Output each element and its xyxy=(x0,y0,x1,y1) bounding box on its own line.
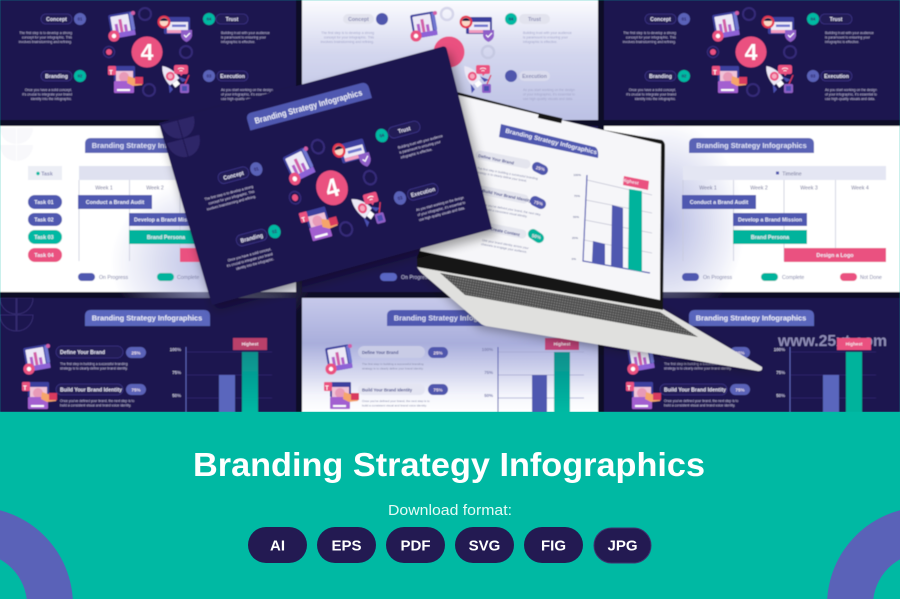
tilted slide cycle diagram: involves brainstorming and refining. xyxy=(206,194,257,212)
slide: dark bar chart, bottom right: strategy is to clearly define your brand identity. xyxy=(664,366,732,370)
slide: dark cycle, top right: it's crucial to integrate your brand xyxy=(626,92,676,96)
main heading: Branding Strategy Infographics xyxy=(193,446,705,483)
tag: highest, bottom right xyxy=(837,338,871,350)
subheading: Download format: xyxy=(388,502,512,519)
slide: light gantt chart, middle right: Complete xyxy=(782,275,804,281)
slide: dark cycle, top left: use high-quality visuals and data. xyxy=(221,97,271,101)
tilted slide cycle diagram: Building trust with your audience xyxy=(397,134,443,150)
tilted slide cycle diagram: 03 xyxy=(397,195,403,201)
slide: light gantt chart, middle right: Not Done xyxy=(860,275,882,281)
tilted slide cycle diagram: use high-quality visuals and data. xyxy=(418,206,466,222)
slide: dark cycle, top right: concept for your infographic. This xyxy=(626,36,676,40)
slide: dark bar chart, bottom left: 75% xyxy=(131,388,141,392)
slide: dark cycle, top right: 03 xyxy=(811,74,816,78)
slide: dark cycle, top left: it's crucial to integrate your brand xyxy=(22,92,72,96)
tilted slide cycle diagram: T xyxy=(301,216,307,224)
slide: dark cycle, top right: Concept xyxy=(650,17,671,23)
laptop screen xyxy=(417,92,665,303)
slide: dark cycle, top left: 4 xyxy=(141,39,154,65)
slide: dark bar chart, bottom left: 50% xyxy=(172,393,181,398)
slide: light gantt chart, middle left: Task 03 xyxy=(34,235,54,241)
slide: dark cycle, top right: 02 xyxy=(682,74,687,78)
slide: dark cycle, top right: Trust xyxy=(830,17,843,23)
slide: dark cycle, top right: identity into the infographic. xyxy=(635,97,676,101)
teal footer panel xyxy=(0,412,900,599)
slide: dark cycle, top left: identity into the infographic. xyxy=(31,97,72,101)
slide: light cycle, top centre: As you start working on the design xyxy=(523,88,575,92)
slide: dark, middle centre: On Progress xyxy=(401,275,431,281)
screen bar chart: 75% xyxy=(574,194,580,198)
slide: light gantt chart, middle left: Week 1 xyxy=(95,186,113,192)
slide: dark cycle, top left: As you start working on the design xyxy=(221,88,273,92)
format pill PDF xyxy=(386,527,445,563)
tilted slide cycle diagram: 02 xyxy=(272,228,278,235)
slide: dark bar chart, bottom left: Once you've defined your brand, the next step is to xyxy=(60,399,134,403)
slide: dark bar chart, bottom right: build a consistent visual and brand voice identity. xyxy=(664,404,735,408)
slide: light gantt chart, middle left: Week 2 xyxy=(146,186,164,192)
slide: dark cycle, top left: 01 xyxy=(78,16,83,22)
slide: light bar chart, bottom centre: 50% xyxy=(484,393,493,398)
slide: dark bar chart, bottom left: Highest xyxy=(242,342,259,346)
slide: dark cycle, top right: use high-quality visuals and data. xyxy=(825,97,875,101)
slide: dark cycle, top left: T xyxy=(109,70,113,76)
slide: light bar chart, bottom centre: Define Your Brand xyxy=(362,350,399,355)
screen bar chart: 50% xyxy=(573,215,579,219)
screen list rows xyxy=(476,153,545,254)
screen bar chart xyxy=(572,173,652,273)
format pill FIG: FIG xyxy=(541,538,566,554)
slide: dark cycle, top right: 01 xyxy=(682,16,687,22)
screen list rows: Once you've defined your brand, the next step xyxy=(480,202,541,217)
slide: dark bar chart, bottom right: Once you've defined your brand, the next step is to xyxy=(664,399,738,403)
slide: light cycle, top centre: 04 xyxy=(509,16,514,22)
screen list rows: 50% xyxy=(531,233,541,240)
slide: dark bar chart, bottom right: T xyxy=(627,386,631,392)
slide: light cycle, top centre: Execution xyxy=(522,74,547,80)
format pill EPS xyxy=(317,527,376,563)
slide: dark bar chart, bottom right: 25% xyxy=(735,350,745,356)
format pill EPS: EPS xyxy=(331,538,362,554)
slide: dark cycle, top right xyxy=(604,0,900,120)
slide: dark bar chart, bottom left xyxy=(0,298,296,412)
slide: dark bar chart, bottom right xyxy=(604,298,900,412)
slide: light cycle, top centre: infographic is effective. xyxy=(523,40,557,44)
slide: light gantt chart, middle right: Week 1 xyxy=(699,186,717,192)
slide: dark bar chart, bottom left: Branding Strategy Infographics xyxy=(92,314,202,322)
slide: light bar chart, bottom centre: The first step in building a successful branding xyxy=(362,362,424,366)
slide collage xyxy=(0,0,900,412)
slide: light cycle, top centre: Concept xyxy=(348,17,369,23)
slide: light gantt chart, middle left: Brand Persona xyxy=(147,235,186,241)
tilted slide cycle diagram: 01 xyxy=(253,166,260,172)
format pill AI xyxy=(248,527,307,563)
slide: light gantt chart, middle left: On Progress xyxy=(99,275,129,281)
slide: light gantt chart, middle left: Task 01 xyxy=(34,200,54,206)
collage backdrop xyxy=(0,0,900,412)
format pill FIG xyxy=(524,527,583,563)
slide: light bar chart, bottom centre: 75% xyxy=(433,388,443,392)
format pill AI: AI xyxy=(270,538,285,554)
slide: light cycle, top centre: involves brainstorming and refining. xyxy=(321,40,374,44)
screen list rows: 25% xyxy=(535,165,545,172)
slide: dark cycle, top left: involves brainstorming and refining. xyxy=(19,40,72,44)
slide: light gantt chart, middle right: Design a Logo xyxy=(816,253,854,259)
slide: light bar chart, bottom centre: Once you've defined your brand, the next step is to xyxy=(362,399,430,403)
slide: dark bar chart, bottom left: Define Your Brand xyxy=(60,350,105,356)
slide: dark cycle, top left: Trust xyxy=(226,17,239,23)
laptop xyxy=(417,92,762,371)
screen list rows: 75% xyxy=(533,200,543,207)
slide: light bar chart, bottom centre: Build Your Brand Identity xyxy=(362,388,413,392)
slide: dark, middle centre xyxy=(302,126,598,292)
slide: light gantt chart, middle right: Week 4 xyxy=(851,186,869,192)
slide: dark bar chart, bottom left: build a consistent visual and brand voice identity. xyxy=(60,404,131,408)
slide: dark cycle, top left: Once you have a solid concept, xyxy=(25,88,72,92)
slide: light bar chart, bottom centre: Branding Strategy Infographics xyxy=(394,314,504,322)
watermark: www.25xt.com xyxy=(777,333,887,350)
format pill PDF: PDF xyxy=(400,538,430,554)
format pill JPG: JPG xyxy=(607,538,638,554)
tilted slide cycle diagram: infographic is effective. xyxy=(400,147,433,160)
tilted slide cycle diagram: concept for your infographic. This xyxy=(208,189,255,206)
slide: light gantt chart, middle left: Develop a Brand Mission xyxy=(134,218,198,224)
hinge xyxy=(417,257,663,310)
slide: dark bar chart, bottom left: Build Your Brand Identity xyxy=(60,388,122,394)
corner arc left xyxy=(0,507,73,599)
tilted slide cycle diagram: 4 xyxy=(322,173,343,204)
slide: dark cycle, top left: 03 xyxy=(207,74,212,78)
screen list rows: strategy is to clearly define your brand. xyxy=(476,170,527,183)
screen list rows: channels to engage your audience. xyxy=(481,242,528,254)
slide: light bar chart, bottom centre: build a consistent visual and brand voice identity. xyxy=(362,404,427,408)
tilted slide cycle diagram: Branding xyxy=(240,233,264,245)
slide: light gantt chart, middle right: On Progress xyxy=(703,275,733,281)
slide: dark cycle, top left: Concept xyxy=(46,17,67,23)
screen bar chart: 100% xyxy=(573,173,581,177)
screen list rows: Define Your Brand xyxy=(478,153,515,166)
slide: dark bar chart, bottom right: Branding Strategy Infographics xyxy=(696,314,806,322)
tilted slide cycle diagram: Execution xyxy=(410,187,437,199)
slide: dark cycle, top left: 02 xyxy=(78,74,83,78)
tilted slide cycle diagram: is paramount to ensuring your xyxy=(399,140,442,155)
tilted slide cycle diagram: identity into the infographic. xyxy=(236,257,275,271)
slide: light cycle, top centre: Building trust with your audience xyxy=(523,31,572,35)
tilted slide cycle diagram: it's crucial to integrate your brand xyxy=(226,252,273,268)
screen list rows: Use your brand identity across your xyxy=(482,238,529,250)
tilted slide cycle diagram: 04 xyxy=(379,132,385,139)
slide: dark bar chart, bottom right: 100% xyxy=(774,347,785,352)
slide: light gantt chart, middle left: Task xyxy=(41,172,53,178)
slide: light gantt chart, middle left xyxy=(0,126,320,347)
slide: dark bar chart, bottom right: Build Your Brand Identity xyxy=(664,388,726,394)
screen bar chart: 0% xyxy=(572,257,576,261)
slide: dark cycle, top right: Branding xyxy=(649,74,672,80)
slide: dark bar chart, bottom left: 100% xyxy=(170,347,181,352)
slide: light bar chart, bottom centre: strategy is to clearly define your brand identity. xyxy=(362,366,424,370)
screen list rows: Build Your Brand Identity xyxy=(482,188,532,204)
slide: light gantt chart, middle left: Branding Strategy Infographics xyxy=(92,141,202,150)
slide: dark cycle, top right: infographic is effective. xyxy=(825,40,859,44)
screen list rows: Create Content xyxy=(490,226,521,237)
slide: dark cycle, top right: 4 xyxy=(745,39,758,65)
slide: dark cycle, top left: is paramount to ensuring your xyxy=(221,36,267,40)
slide: light gantt chart, middle left: Task 02 xyxy=(34,218,54,224)
screen bar chart: 25% xyxy=(572,236,578,240)
slide: light bar chart, bottom centre xyxy=(302,298,598,412)
laptop shadow xyxy=(417,268,762,374)
slide: dark bar chart, bottom right: The first step in building a successful branding xyxy=(664,362,732,366)
slide: light bar chart, bottom centre: T xyxy=(325,386,329,392)
slide: dark bar chart, bottom right: Define Your Brand xyxy=(664,350,709,356)
slide: light cycle, top centre: use high-quality visuals and data. xyxy=(523,97,573,101)
slide: light gantt chart, middle left: Complete xyxy=(177,275,199,281)
slide: dark cycle, top right: Execution xyxy=(824,74,849,80)
slide: dark cycle, top right: is paramount to ensuring your xyxy=(825,36,871,40)
slide: light bar chart, bottom centre: 25% xyxy=(433,350,443,356)
slide: light gantt chart, middle right: Conduct a Brand Audit xyxy=(690,200,748,206)
tilted slide cycle diagram: The first step is to develop a strong xyxy=(204,185,254,202)
slide: light gantt chart, middle right: Brand Persona xyxy=(751,235,790,241)
slide: dark cycle, top right: of your infographic, it's essential to xyxy=(825,92,877,96)
slide: dark cycle, top left: Branding xyxy=(45,74,68,80)
tilted slide decoration xyxy=(162,116,204,161)
slide: dark cycle, top right: involves brainstorming and refining. xyxy=(623,40,676,44)
laptop base xyxy=(417,258,762,371)
slide: light cycle, top centre: Trust xyxy=(528,17,541,23)
tilted slide title xyxy=(246,82,372,130)
slide: light cycle, top centre xyxy=(302,0,598,120)
slide: dark bar chart, bottom left: 75% xyxy=(172,370,181,375)
screen list rows: The first step in building a successful branding xyxy=(477,166,538,181)
slide: dark bar chart, bottom right: 50% xyxy=(776,393,785,398)
slide: dark cycle, top left: Execution xyxy=(220,74,245,80)
screen bar chart: Highest xyxy=(622,177,640,186)
format pill JPG xyxy=(594,528,651,563)
slide: light gantt chart, middle left: Conduct a Brand Audit xyxy=(86,200,144,206)
slide: light gantt chart, middle right: Branding Strategy Infographics xyxy=(696,141,807,150)
slide: light gantt chart, middle right: Develop a Brand Mission xyxy=(738,218,802,224)
slide: dark cycle, top left xyxy=(0,0,296,120)
slide: dark cycle, top right: 04 xyxy=(811,16,816,22)
screen title tab: Branding Strategy Infographics xyxy=(505,128,598,157)
tag: highest, bottom right: Highest xyxy=(846,342,863,346)
slide: light bar chart, bottom centre: 100% xyxy=(482,347,493,352)
slide: dark cycle, top right: As you start working on the design xyxy=(825,88,877,92)
tilted slide cycle diagram xyxy=(196,108,467,274)
slide: dark cycle, top right: T xyxy=(713,70,717,76)
tilted slide cycle diagram: Once you have a solid concept, xyxy=(227,247,272,263)
slide: light gantt chart, middle right: Week 3 xyxy=(800,186,818,192)
tilted slide cycle diagram: As you start working on the design xyxy=(416,196,464,212)
tilted dark cycle slide xyxy=(159,46,492,305)
format pill SVG: SVG xyxy=(469,538,500,554)
slide: dark bar chart, bottom right: 75% xyxy=(776,370,785,375)
corner arc right xyxy=(827,507,900,599)
slide: light bar chart, bottom centre: Highest xyxy=(554,342,571,346)
format pill SVG xyxy=(455,527,514,563)
slide: dark cycle, top left: of your infographic, it's essential to xyxy=(221,92,273,96)
tilted slide cycle diagram: of your infographic, it's essential to xyxy=(417,200,466,217)
slide: dark bar chart, bottom right: 75% xyxy=(735,388,745,392)
slide: light cycle, top centre: of your infographic, it's essential to xyxy=(523,92,575,96)
slide: light cycle, top centre: concept for your infographic. This xyxy=(324,36,374,40)
slide: light gantt chart, middle right: Timeline xyxy=(782,172,802,178)
slide: dark bar chart, bottom left: T xyxy=(23,386,27,392)
tilted slide cycle diagram: Concept xyxy=(223,171,245,182)
slide: dark cycle, top left: 04 xyxy=(207,16,212,22)
slide: light gantt chart, middle right xyxy=(585,120,900,330)
tilted slide shadow xyxy=(162,52,497,311)
slide: light bar chart, bottom centre: 75% xyxy=(484,370,493,375)
slide: dark cycle, top right: Building trust with your audience xyxy=(825,31,874,35)
slide: dark cycle, top right: The first step is to develop a strong xyxy=(623,31,676,35)
slide: dark bar chart, bottom left: 25% xyxy=(131,350,141,356)
slide: dark bar chart, bottom left: strategy is to clearly define your brand identity. xyxy=(60,366,128,370)
tilted slide cycle diagram: Trust xyxy=(397,126,412,135)
keyboard xyxy=(440,273,698,337)
slide: light gantt chart, middle left: Task 04 xyxy=(34,253,54,259)
slide: dark cycle, top left: concept for your infographic. This xyxy=(22,36,72,40)
slide: dark cycle, top right: Once you have a solid concept, xyxy=(629,88,676,92)
slide: light cycle, top centre: is paramount to ensuring your xyxy=(523,36,569,40)
slide: dark cycle, top left: Building trust with your audience xyxy=(221,31,270,35)
slide: dark cycle, top left: infographic is effective. xyxy=(221,40,255,44)
slide: light gantt chart, middle right: Week 2 xyxy=(750,186,768,192)
screen list rows: is to build a consistent visual identity. xyxy=(479,206,528,219)
tilted slide title: Branding Strategy Infographics xyxy=(253,88,364,126)
slide: dark bar chart, bottom left: The first step in building a successful branding xyxy=(60,362,128,366)
slide: dark cycle, top left: The first step is to develop a strong xyxy=(19,31,72,35)
slide: light cycle, top centre: The first step is to develop a strong xyxy=(321,31,374,35)
